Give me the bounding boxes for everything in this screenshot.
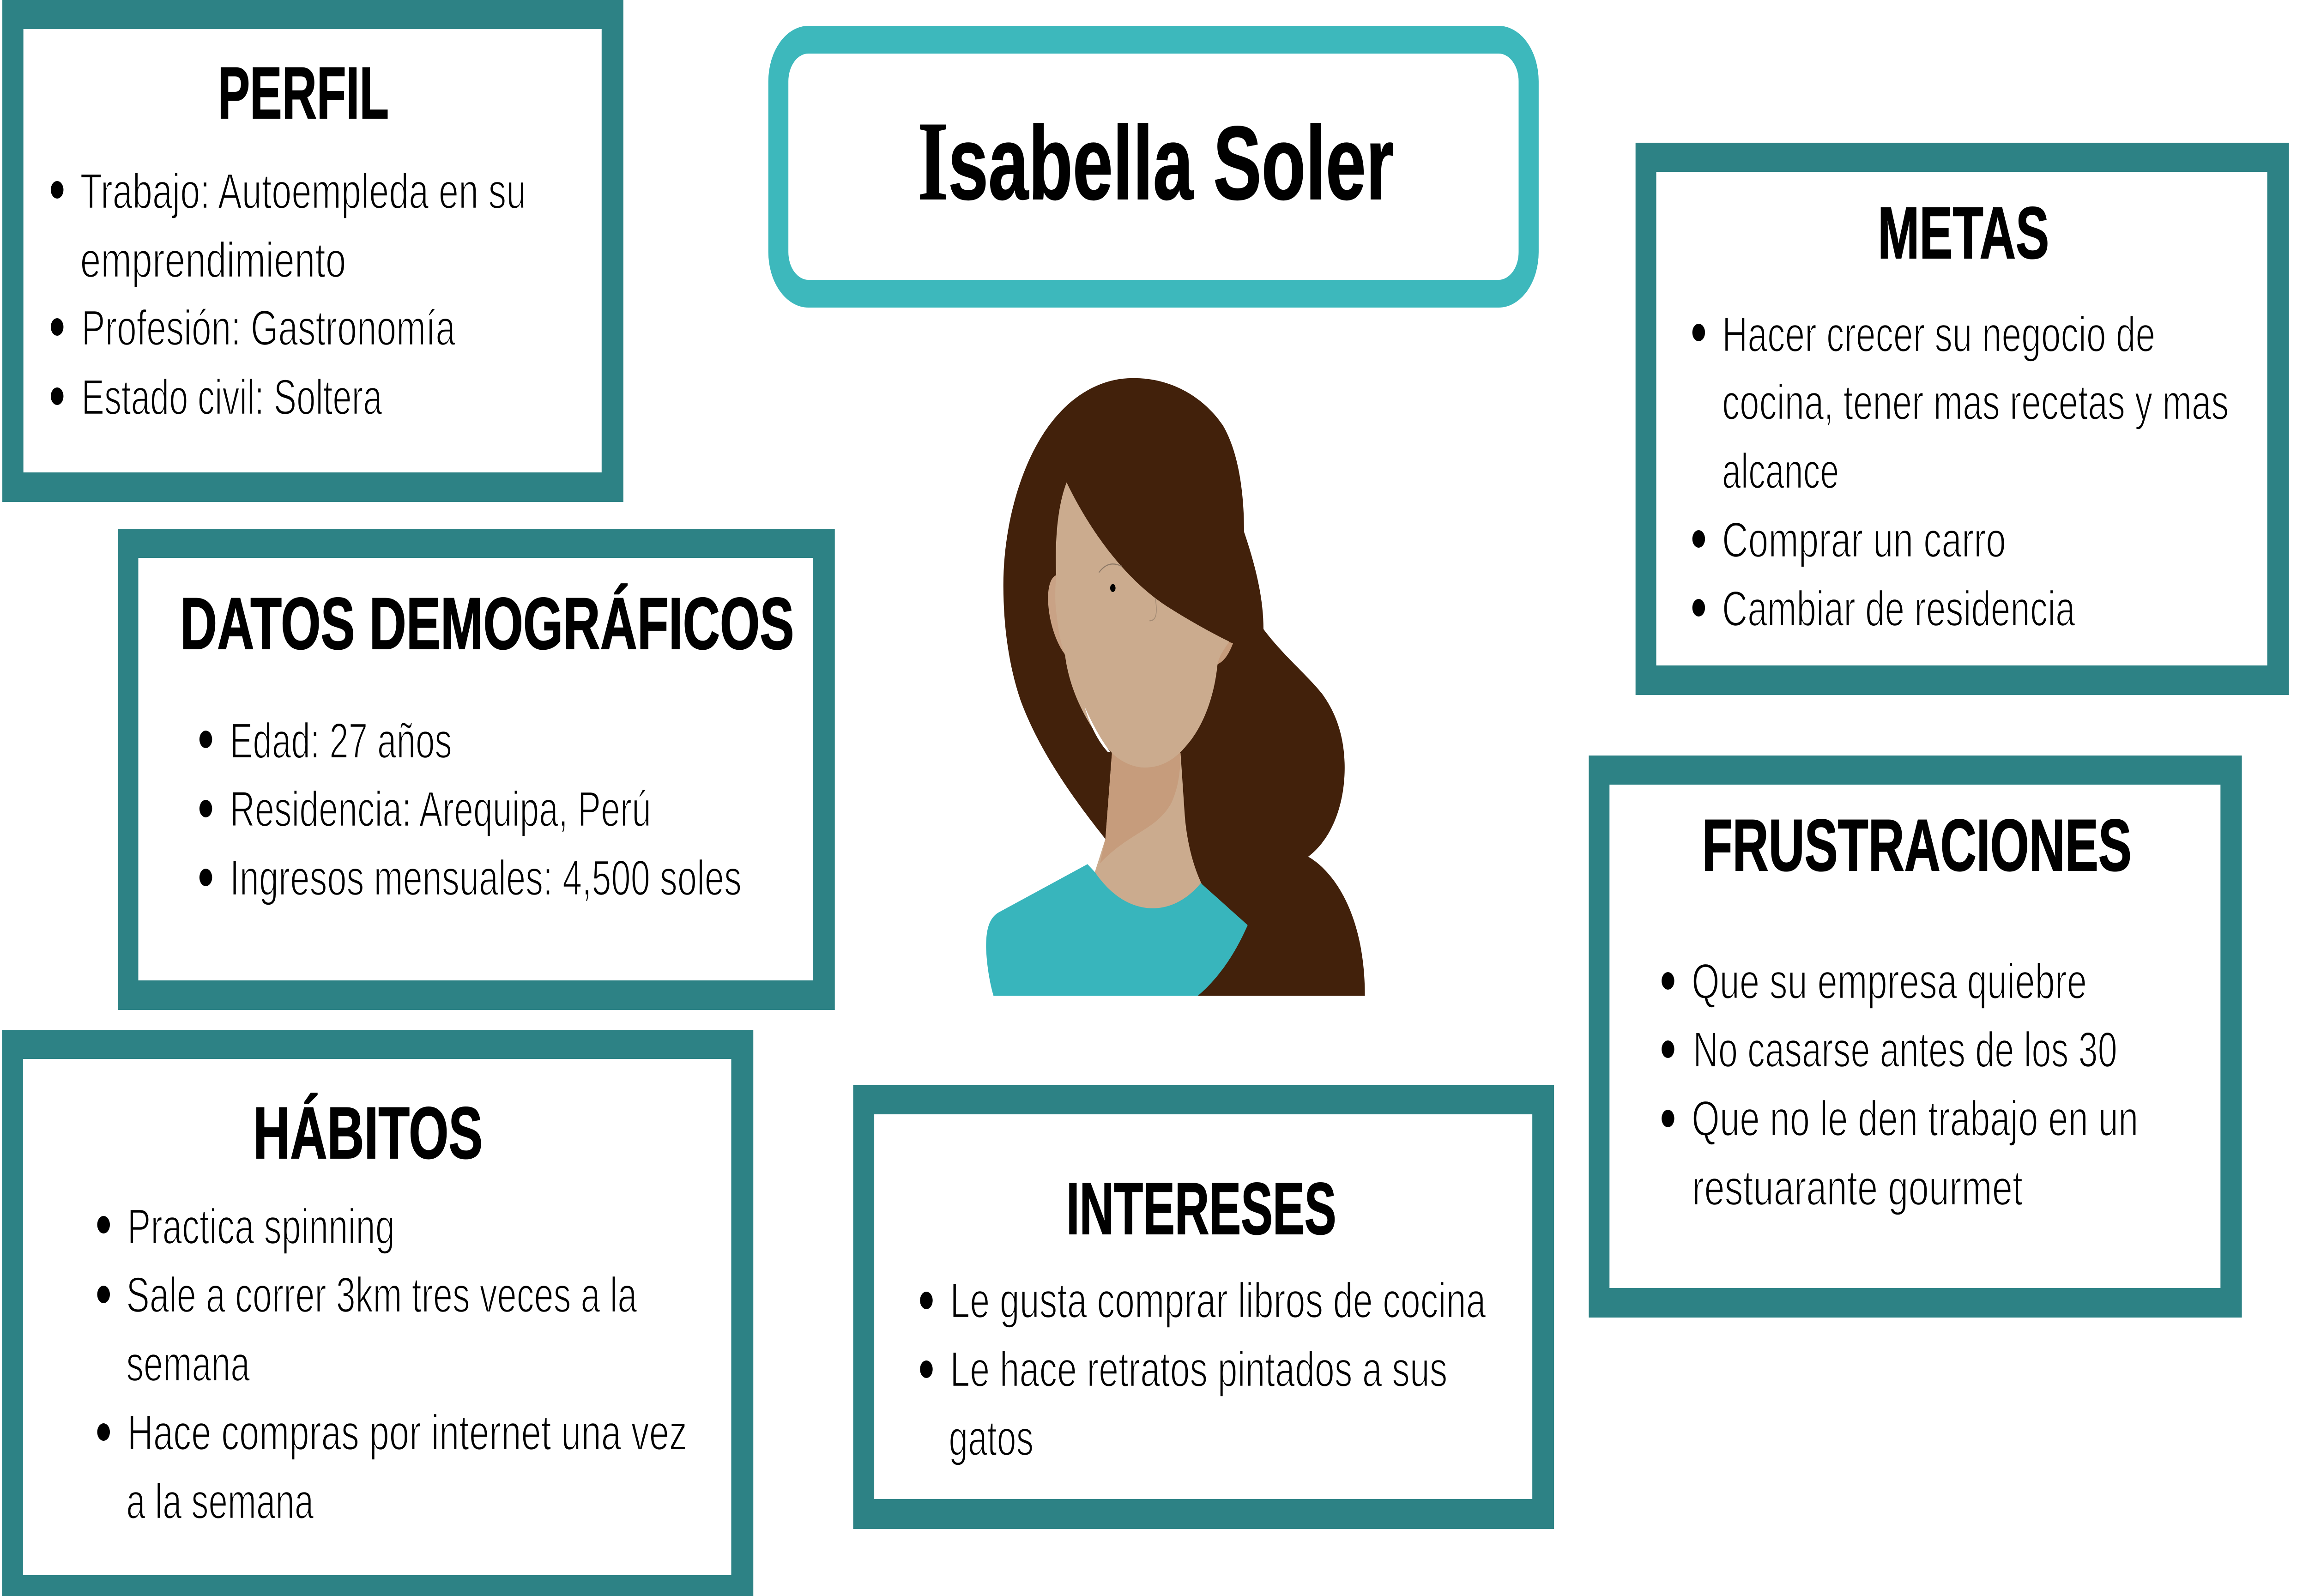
neck <box>1094 753 1202 921</box>
panel: metas <box>1636 143 2289 695</box>
panel: habitos <box>2 1030 753 1596</box>
habitos list: semana <box>126 1336 250 1391</box>
frustraciones list <box>1662 954 2138 1215</box>
frustraciones list: No casarse antes de los 30 <box>1693 1022 2117 1077</box>
heading: perfil: PERFIL <box>218 52 389 134</box>
heading: metas: METAS <box>1878 192 2049 274</box>
right ear <box>1216 638 1233 665</box>
habitos frame <box>2 1030 753 1596</box>
portrait illustration <box>986 378 1365 996</box>
title box: isabella soler <box>778 40 1529 294</box>
perfil list: Profesión: Gastronomía <box>82 300 455 356</box>
datos list: Residencia: Arequipa, Perú <box>230 781 651 837</box>
frustraciones list: Que su empresa quiebre <box>1692 954 2087 1009</box>
datos list: Edad: 27 años <box>230 713 452 768</box>
habitos list: a la semana <box>126 1474 314 1529</box>
habitos list: Sale a correr 3km tres veces a la <box>126 1267 637 1323</box>
intereses list <box>920 1273 1486 1466</box>
shirt <box>986 864 1248 996</box>
perfil list: emprendimiento <box>80 232 346 288</box>
perfil list: Estado civil: Soltera <box>82 369 382 425</box>
perfil list <box>51 163 526 425</box>
metas list: Hacer crecer su negocio de <box>1722 307 2155 362</box>
habitos list: Hace compras por internet una vez <box>127 1405 687 1460</box>
datos list <box>199 713 742 906</box>
ear <box>1048 575 1070 653</box>
heading: intereses: INTERESES <box>1066 1168 1336 1250</box>
perfil list: Trabajo: Autoempleda en su <box>80 163 526 219</box>
frustraciones list: Que no le den trabajo en un <box>1692 1091 2138 1146</box>
intereses list: gatos <box>949 1410 1034 1466</box>
metas list <box>1692 307 2229 636</box>
heading: frustraciones: FRUSTRACIONES <box>1702 804 2132 886</box>
face <box>1055 483 1229 768</box>
title text: Isabella Soler <box>918 98 1394 224</box>
frustraciones frame <box>1589 756 2242 1318</box>
metas list: cocina, tener mas recetas y mas <box>1722 375 2229 430</box>
intereses list: Le hace retratos pintados a sus <box>950 1342 1447 1397</box>
metas list: alcance <box>1722 443 1839 499</box>
neck shadow <box>1100 753 1180 863</box>
heading: datos demograficos: DATOS DEMOGRÁFICOS <box>180 583 794 665</box>
title frame <box>778 40 1529 294</box>
datos list: Ingresos mensuales: 4,500 soles <box>230 850 742 906</box>
panel: intereses <box>853 1085 1554 1529</box>
panel: perfil <box>2 0 623 502</box>
habitos list <box>97 1199 687 1529</box>
chin highlight <box>1084 707 1111 752</box>
metas list: Cambiar de residencia <box>1722 581 2075 636</box>
nose <box>1149 598 1156 621</box>
panel: frustraciones <box>1589 756 2242 1318</box>
frustraciones list: restuarante gourmet <box>1692 1160 2023 1215</box>
panel: datos demograficos <box>118 529 835 1010</box>
eyebrow <box>1099 564 1122 573</box>
hair <box>1003 378 1365 996</box>
intereses list: Le gusta comprar libros de cocina <box>950 1273 1486 1328</box>
eye <box>1110 584 1116 592</box>
habitos list: Practica spinning <box>127 1199 395 1254</box>
perfil frame <box>2 0 623 502</box>
intereses frame <box>853 1085 1554 1529</box>
datos frame <box>118 529 835 1010</box>
metas list: Comprar un carro <box>1722 512 2006 568</box>
heading: habitos: HÁBITOS <box>253 1092 483 1174</box>
metas frame <box>1636 143 2289 695</box>
